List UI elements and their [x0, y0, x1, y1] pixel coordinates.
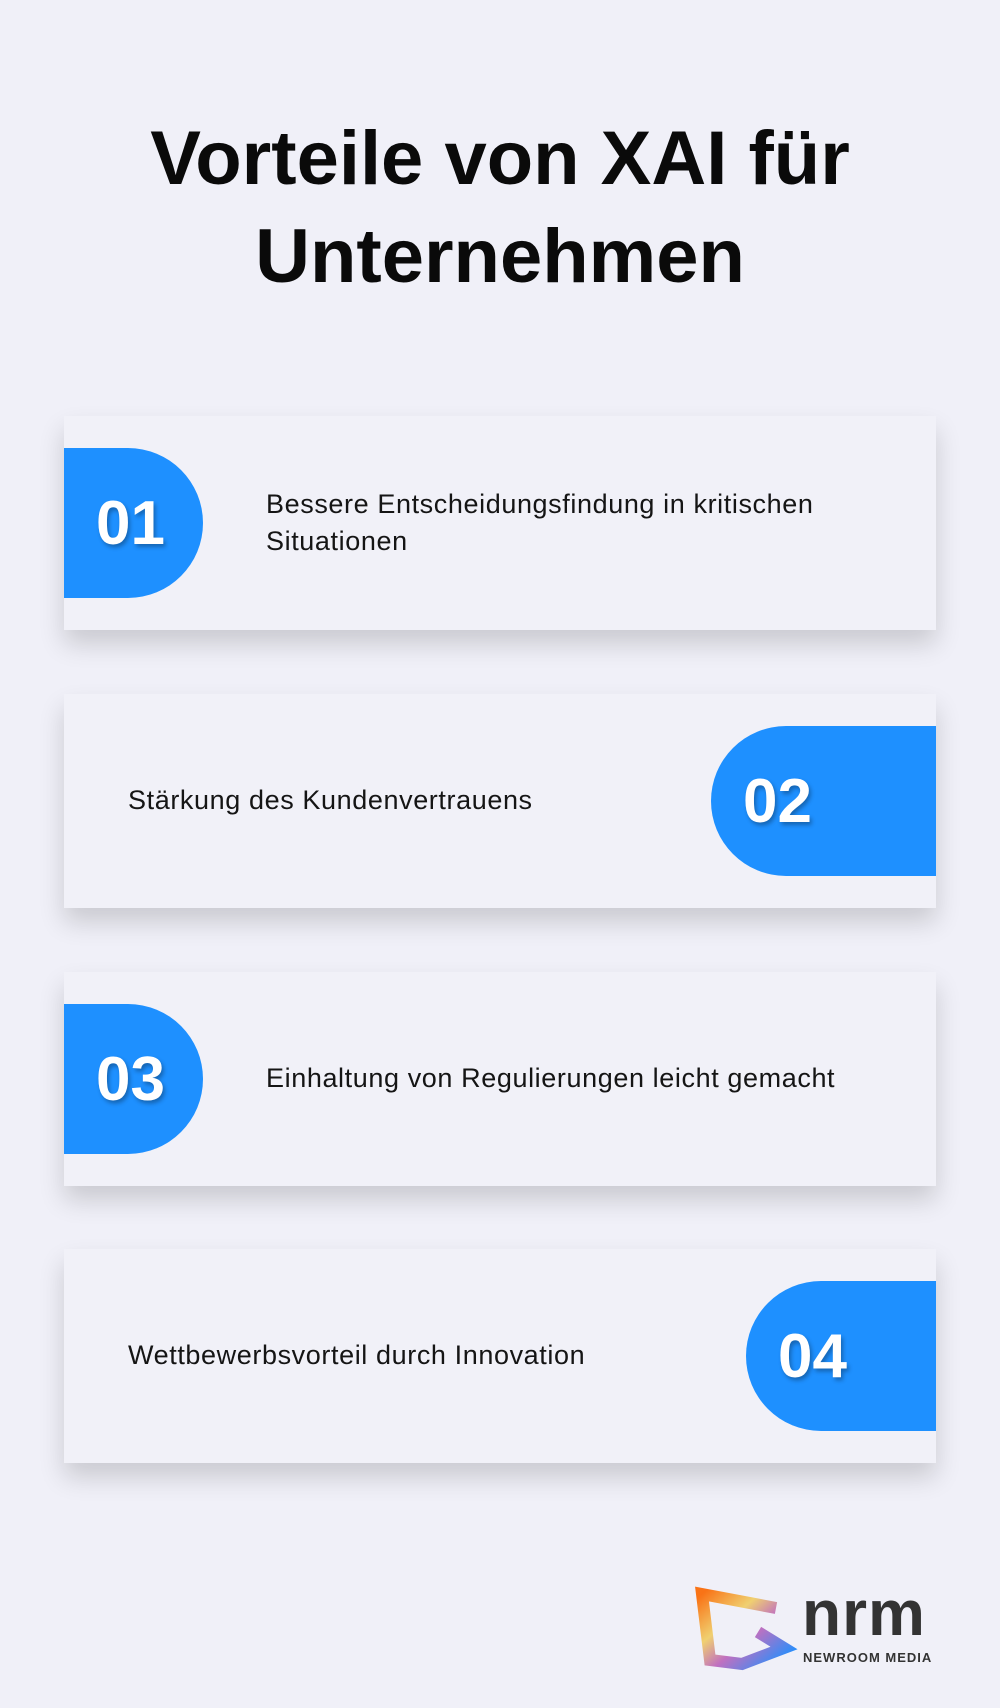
- title: Unternehmen: [255, 214, 745, 299]
- text 3: Einhaltung von Regulierungen leicht gemacht: [266, 1063, 835, 1093]
- logo text: nrm: [802, 1577, 926, 1649]
- card 2: [64, 694, 936, 908]
- badge 02: 02: [743, 766, 812, 836]
- icon: logo mark: [695, 1586, 798, 1670]
- badge 01: [64, 448, 203, 598]
- badge 04: [746, 1281, 936, 1431]
- badge 03: [64, 1004, 203, 1154]
- title: Vorteile von XAI für: [150, 116, 850, 201]
- badge 01: 01: [96, 488, 165, 558]
- badge 03: 03: [96, 1044, 165, 1114]
- logo: [695, 1577, 932, 1670]
- card 1: [64, 416, 936, 630]
- badge 02: [711, 726, 936, 876]
- badge 04: 04: [778, 1322, 847, 1390]
- logo: NEWROOM MEDIA: [803, 1650, 932, 1665]
- text 4: Wettbewerbsvorteil durch Innovation: [128, 1340, 585, 1370]
- text 1: Bessere Entscheidungsfindung in kritischen Situationen: [266, 489, 814, 556]
- card 3: [64, 972, 936, 1186]
- card 4: [64, 1249, 936, 1463]
- title: [150, 116, 850, 299]
- text 2: Stärkung des Kundenvertrauens: [128, 785, 533, 815]
